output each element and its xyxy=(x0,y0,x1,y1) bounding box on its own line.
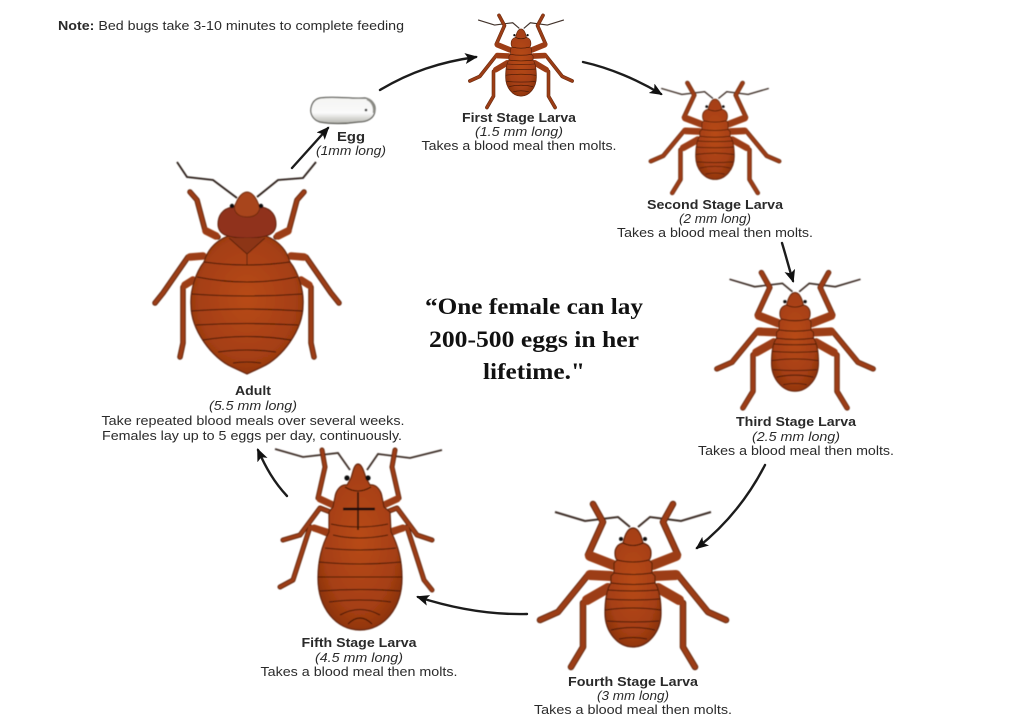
icon: first stage larva xyxy=(470,15,572,108)
label: fourth stage larva xyxy=(534,675,732,717)
callout: egg-laying quote: lifetime." xyxy=(483,359,585,384)
label: fifth stage larva: (4.5 mm long) xyxy=(315,651,403,665)
arrow: second to third stage xyxy=(782,243,793,281)
label: adult bed bug: (5.5 mm long) xyxy=(209,399,297,413)
label: second stage larva: Second Stage Larva xyxy=(647,198,784,212)
label: second stage larva: Takes a blood meal then molts. xyxy=(617,226,813,240)
arrow: adult to egg xyxy=(292,128,328,168)
label: third stage larva: (2.5 mm long) xyxy=(752,430,840,444)
note: feeding time: Note: Bed bugs take 3-10 minutes to complete feeding xyxy=(58,19,404,33)
callout: egg-laying quote xyxy=(425,294,644,384)
arrow: fourth to fifth stage xyxy=(418,597,527,614)
label: third stage larva: Takes a blood meal then molts. xyxy=(698,444,894,458)
arrow: egg to first stage xyxy=(380,57,476,90)
label: egg: Egg xyxy=(337,130,365,144)
arrow: fifth stage to adult xyxy=(258,450,287,496)
label: third stage larva xyxy=(698,415,894,458)
label: adult bed bug xyxy=(102,384,404,443)
label: adult bed bug: Take repeated blood meals over several weeks. xyxy=(102,414,404,428)
arrow: first to second stage xyxy=(583,62,661,94)
label: fourth stage larva: Fourth Stage Larva xyxy=(568,675,699,689)
label: third stage larva: Third Stage Larva xyxy=(736,415,857,429)
label: first stage larva xyxy=(422,111,616,153)
label: second stage larva xyxy=(617,198,813,240)
callout: egg-laying quote: “One female can lay xyxy=(425,294,644,319)
label: fourth stage larva: (3 mm long) xyxy=(597,689,669,703)
icon: adult bed bug xyxy=(155,162,339,374)
arrow: third to fourth stage xyxy=(697,465,765,548)
icon: egg xyxy=(311,97,375,124)
label: adult bed bug: Adult xyxy=(235,384,272,398)
callout: egg-laying quote: 200-500 eggs in her xyxy=(429,327,639,352)
label: first stage larva: Takes a blood meal then molts. xyxy=(422,139,616,153)
icon: third stage larva xyxy=(717,273,873,408)
label: fifth stage larva xyxy=(260,636,458,679)
label: second stage larva: (2 mm long) xyxy=(679,212,751,226)
label: first stage larva: First Stage Larva xyxy=(462,111,577,125)
icon: second stage larva xyxy=(651,83,779,193)
label: fifth stage larva: Takes a blood meal then molts. xyxy=(260,665,458,679)
label: fourth stage larva: Takes a blood meal then molts. xyxy=(534,703,732,717)
label: egg xyxy=(316,130,386,158)
label: adult bed bug: Females lay up to 5 eggs per day, continuously. xyxy=(102,429,402,443)
label: egg: (1mm long) xyxy=(316,144,386,158)
label: fifth stage larva: Fifth Stage Larva xyxy=(302,636,418,650)
label: first stage larva: (1.5 mm long) xyxy=(475,125,563,139)
icon: fifth stage larva xyxy=(275,449,442,630)
icon: fourth stage larva xyxy=(540,504,726,667)
